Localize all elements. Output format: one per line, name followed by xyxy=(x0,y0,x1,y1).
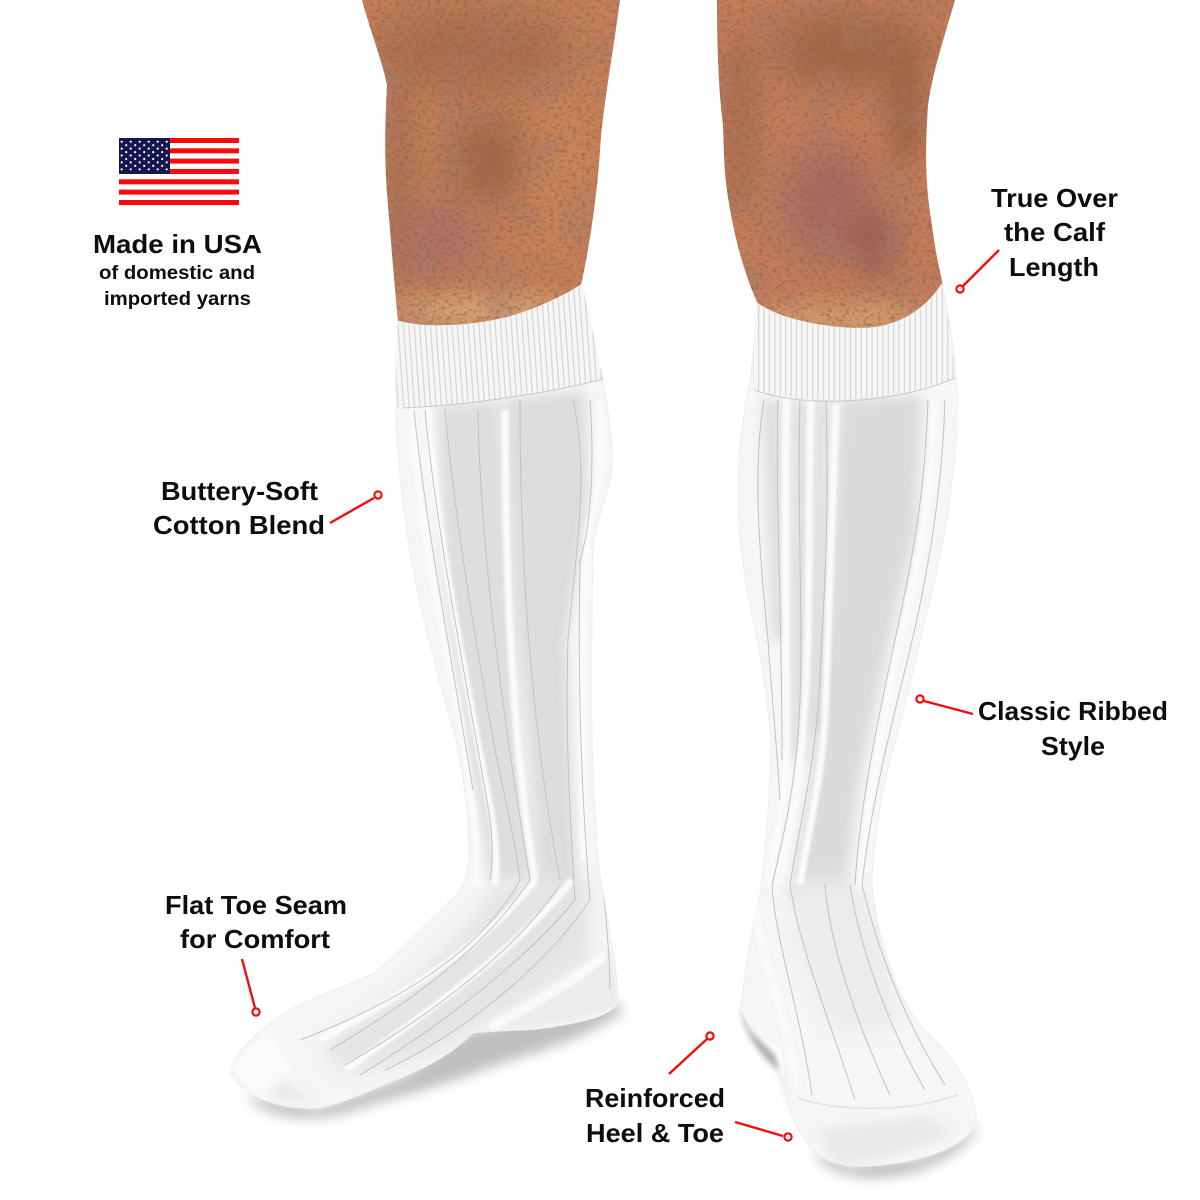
callout: reinforced heel and toe: Reinforced xyxy=(585,1083,725,1113)
callout: true over the calf length: the Calf xyxy=(1004,217,1105,247)
callout: true over the calf length: True Over xyxy=(991,183,1118,213)
heel and toe: left sock xyxy=(512,960,614,1025)
callout: reinforced heel and toe xyxy=(585,1032,792,1148)
text block: made in USA: Made in USA xyxy=(93,229,262,259)
ribbed cuff: left sock xyxy=(396,284,603,408)
text block: made in USA: imported yarns xyxy=(104,289,251,310)
sock: right xyxy=(738,284,976,1166)
foot shadow: left xyxy=(245,1000,625,1118)
callout: flat toe seam for comfort: for Comfort xyxy=(180,924,330,954)
callout: classic ribbed style: Classic Ribbed xyxy=(978,696,1168,726)
foot shadow: right xyxy=(741,1005,980,1178)
text block: made in USA xyxy=(93,229,262,310)
callout: true over the calf length: Length xyxy=(1009,252,1099,282)
callout: buttery-soft cotton blend: Buttery-Soft xyxy=(161,476,318,506)
skin: right knee xyxy=(710,0,960,345)
icon: american flag xyxy=(119,138,239,205)
toe seam: right sock xyxy=(798,1095,958,1109)
rib lines: left sock xyxy=(300,400,610,1075)
callout: buttery-soft cotton blend: Cotton Blend xyxy=(153,510,325,540)
callout: flat toe seam for comfort xyxy=(165,890,347,1016)
callout: classic ribbed style: Style xyxy=(1041,731,1105,761)
callout: buttery-soft cotton blend xyxy=(153,476,382,540)
leg grey bands: right sock xyxy=(762,395,922,900)
skin: left knee xyxy=(355,0,625,345)
sock: left xyxy=(231,284,618,1108)
text block: made in USA: of domestic and xyxy=(99,263,255,284)
white ribs: right sock xyxy=(754,398,922,926)
rib lines: right sock xyxy=(758,400,945,1100)
callout: reinforced heel and toe: Heel & Toe xyxy=(586,1118,724,1148)
leg grey bands: left sock xyxy=(437,390,588,900)
callout: classic ribbed style xyxy=(916,695,1168,761)
callout: flat toe seam for comfort: Flat Toe Seam xyxy=(165,890,347,920)
white ribs: left sock xyxy=(320,400,601,1070)
callout: true over the calf length xyxy=(956,183,1118,293)
ribbed cuff: right sock xyxy=(753,284,955,401)
